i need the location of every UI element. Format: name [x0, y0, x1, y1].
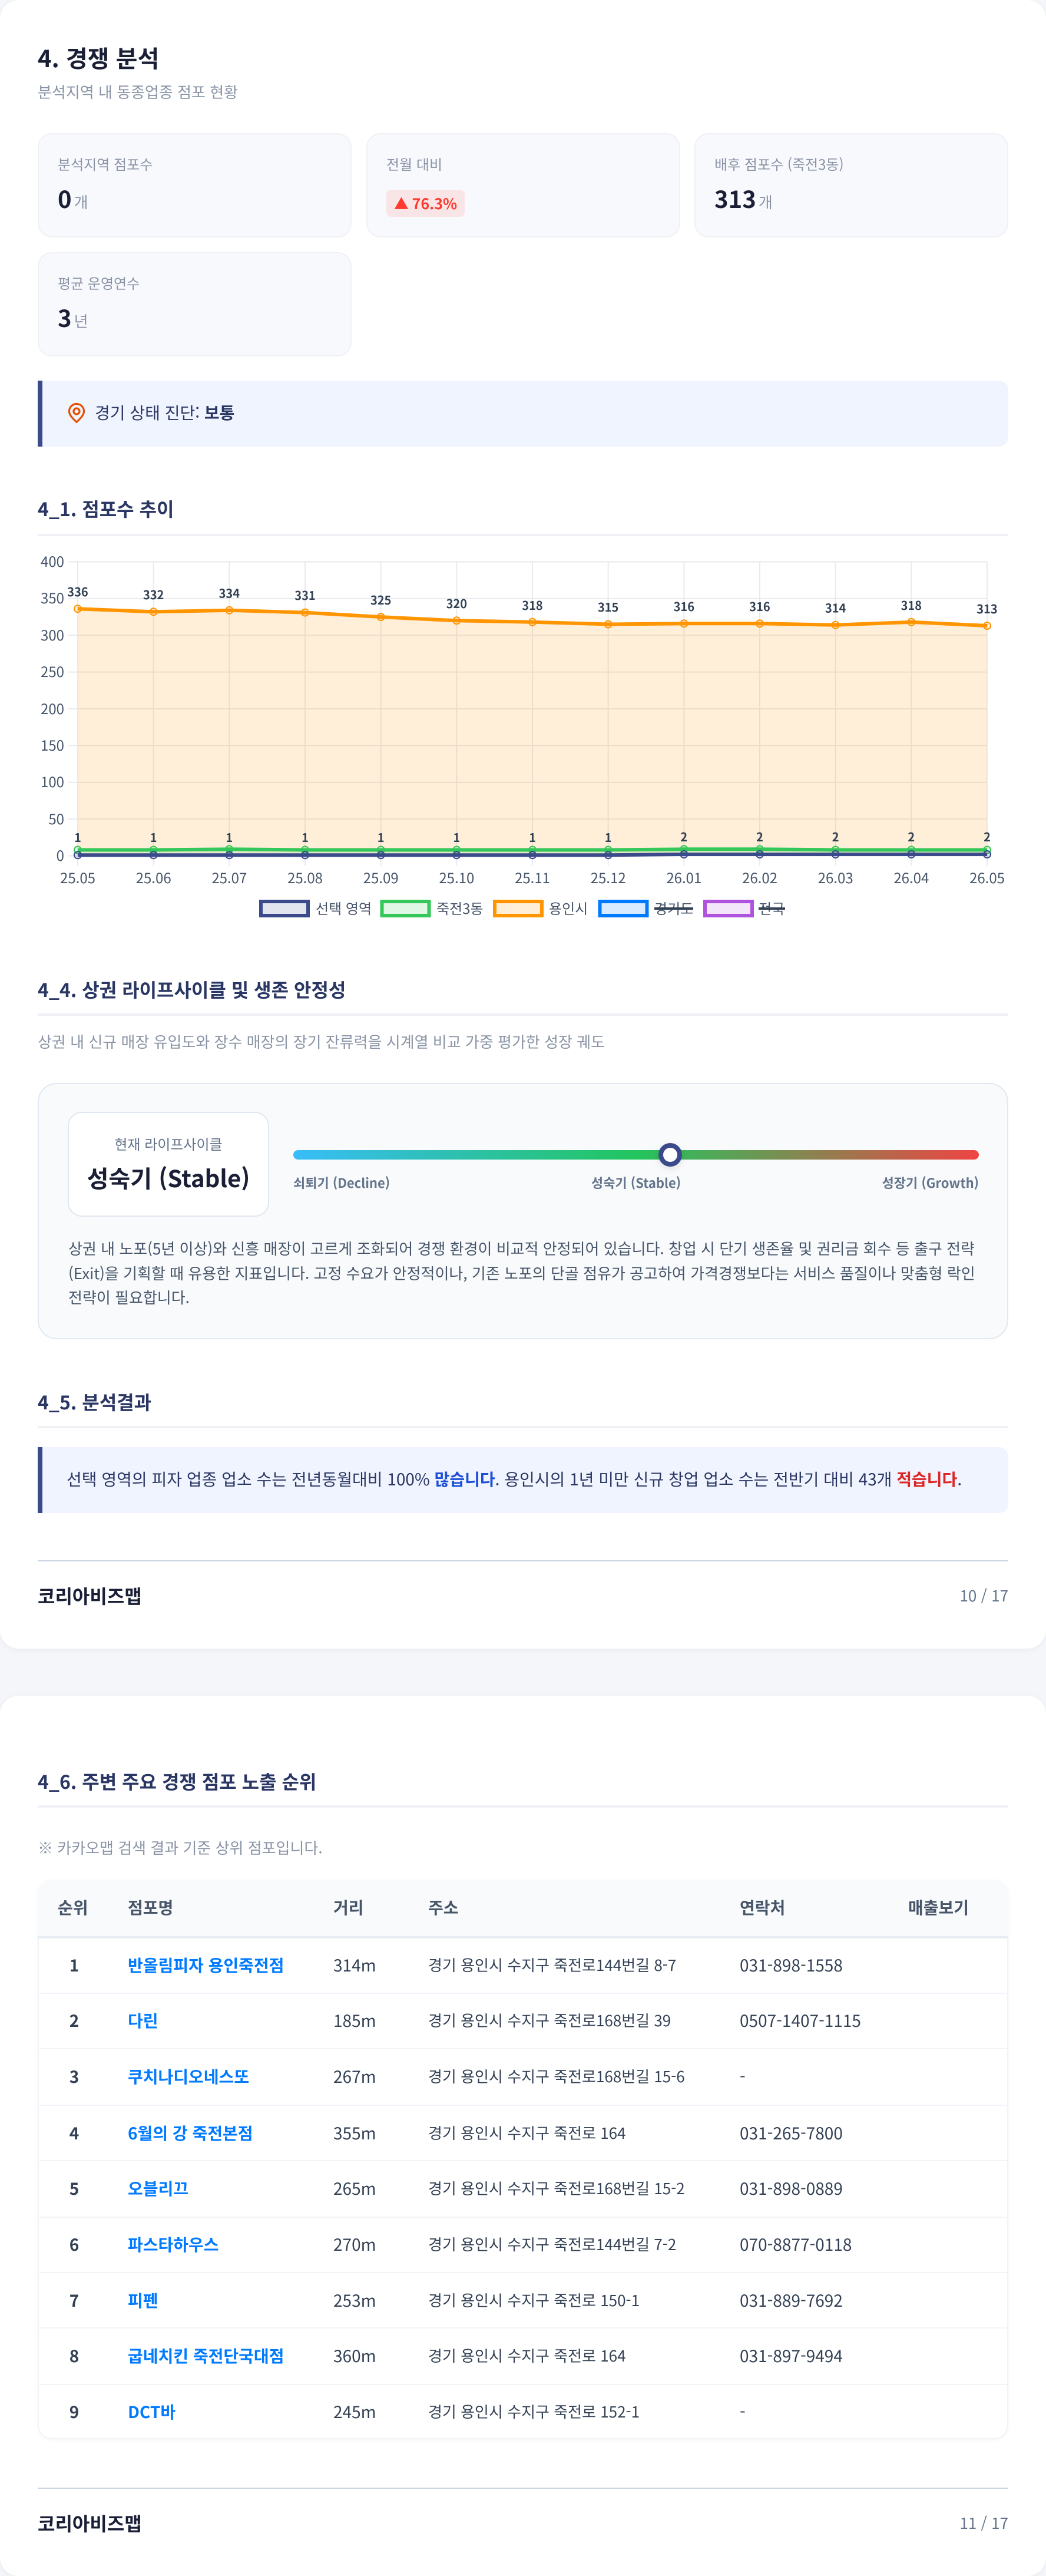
- row 4: 6월의 강 죽전본점: [128, 2121, 253, 2145]
- row 1: 1: [69, 1953, 79, 1977]
- stat card: 전월 대비: [366, 133, 680, 237]
- row 9: [69, 2400, 746, 2423]
- row 3: 3: [69, 2065, 79, 2088]
- row 9: DCT바: [128, 2400, 176, 2423]
- badge: 76.3% up: ▲ 76.3%: [394, 193, 457, 214]
- lifecycle paragraph: 상권 내 노포(5년 이상)와 신흥 매장이 고르게 조화되어 경쟁 환경이 비교적 안정되어 있습니다. 창업 시 단기 생존율 및 권리금 회수 등 출구 전략: [68, 1237, 975, 1259]
- lifecycle marker: [658, 1143, 682, 1167]
- y axis labels: 200: [41, 698, 64, 718]
- row 8: 8: [69, 2344, 79, 2367]
- row 2: [38, 1994, 1008, 2049]
- row 3: 쿠치나디오네스또: [128, 2065, 249, 2088]
- line chart: 점포수 추이: [41, 550, 1005, 918]
- competitor table: [38, 1880, 1008, 2439]
- result callout: 선택 영역의 피자 업종 업소 수는 전년동월대비 100% 많습니다. 용인시의 1년 미만 신규 창업 업소 수는 전반기 대비 43개 적습니다.: [67, 1467, 962, 1491]
- data labels: 용인시: 320: [446, 595, 467, 612]
- diagnosis banner: [38, 381, 1008, 447]
- data labels: 선택 영역: 2: [908, 828, 915, 845]
- x axis labels: 26.03: [818, 867, 853, 887]
- data labels: 용인시: 316: [749, 597, 770, 615]
- y axis labels: [41, 550, 64, 865]
- y axis labels: 50: [48, 808, 64, 828]
- legend: 전국: [759, 897, 784, 918]
- row 1: [38, 1938, 1008, 1994]
- x axis labels: [60, 867, 1005, 887]
- icon: location pin: [68, 403, 85, 423]
- data labels: 용인시: 316: [674, 597, 694, 615]
- x axis labels: 25.06: [136, 867, 171, 887]
- x axis labels: 26.05: [969, 867, 1005, 887]
- stat card: 분석지역 점포수: 분석지역 점포수: [58, 153, 153, 174]
- table header: 주소: [428, 1895, 459, 1919]
- row 4: [38, 2106, 1008, 2161]
- row 6: 6: [69, 2232, 79, 2256]
- y axis labels: 0: [57, 844, 64, 865]
- row 8: [38, 2329, 1008, 2385]
- stat card: 분석지역 점포수: 0개: [58, 181, 88, 215]
- data labels: 선택 영역: 2: [984, 828, 991, 845]
- data labels: 용인시: 334: [219, 584, 240, 601]
- table note: ※ 카카오맵 검색 결과 기준 상위 점포입니다.: [38, 1837, 323, 1858]
- stat card: 배후 점포수: 배후 점포수 (죽전3동): [714, 153, 844, 174]
- row 1: 314m: [333, 1953, 376, 1977]
- table header: 순위: [58, 1895, 88, 1919]
- stat card: 분석지역 점포수: [38, 133, 352, 237]
- data labels: 선택 영역: 1: [150, 828, 157, 846]
- row 7: 7: [69, 2288, 79, 2312]
- heading: 4_4: [38, 977, 1008, 1016]
- row 6: 070-8877-0118: [740, 2232, 852, 2256]
- row 5: 오블리끄: [128, 2177, 188, 2200]
- data labels: 용인시: 336: [67, 583, 88, 600]
- x axis labels: 25.09: [363, 867, 399, 887]
- x axis labels: 26.04: [893, 867, 929, 887]
- legend: 죽전3동: [436, 897, 484, 918]
- row 1: 반올림피자 용인죽전점: [128, 1953, 284, 1977]
- row 6: 경기 용인시 수지구 죽전로144번길 7-2: [428, 2233, 676, 2255]
- row 9: 9: [69, 2400, 79, 2423]
- x axis labels: 25.05: [60, 867, 95, 887]
- footer: page 10: [38, 1560, 1008, 1597]
- legend: 선택 영역: [316, 897, 372, 918]
- row 4: 4: [69, 2121, 79, 2145]
- row 5: 5: [69, 2177, 79, 2200]
- row 1: 031-898-1558: [740, 1953, 843, 1977]
- data labels: 용인시: [67, 583, 998, 617]
- row 7: 031-889-7692: [740, 2288, 843, 2312]
- data labels: 용인시: 332: [143, 586, 164, 603]
- y axis labels: 350: [41, 587, 64, 607]
- row 2: 다린: [128, 2009, 158, 2032]
- table header: [38, 1880, 1008, 1938]
- data labels: 선택 영역: [74, 828, 991, 846]
- data labels: 선택 영역: 2: [680, 828, 687, 845]
- row 2: 경기 용인시 수지구 죽전로168번길 39: [428, 2009, 671, 2031]
- data labels: 선택 영역: 1: [605, 828, 612, 846]
- x axis labels: 26.02: [742, 867, 777, 887]
- lifecycle paragraph: [68, 1237, 975, 1308]
- lifecycle paragraph: 전략이 필요합니다.: [68, 1286, 190, 1308]
- lifecycle paragraph: (Exit)을 기획할 때 유용한 지표입니다. 고정 수요가 안정적이나, 기존 노포의 단골 점유가 공고하여 가격경쟁보다는 서비스 품질이나 맞춤형 락인: [68, 1262, 975, 1284]
- heading: 4_5: [38, 1389, 1008, 1428]
- stat card: 배후 점포수: [694, 133, 1008, 237]
- scale label: decline: 쇠퇴기 (Decline): [293, 1173, 390, 1192]
- heading: 4_6: 4_6. 주변 주요 경쟁 점포 노출 순위: [38, 1768, 316, 1795]
- row 1: 경기 용인시 수지구 죽전로144번길 8-7: [428, 1954, 676, 1976]
- x axis labels: 25.11: [515, 867, 550, 887]
- series: 죽전3동: [74, 846, 991, 856]
- footer: page 11: [38, 2488, 1008, 2524]
- data labels: 용인시: 318: [901, 596, 922, 613]
- heading: 4_6: [38, 1769, 1008, 1808]
- row 6: 파스타하우스: [128, 2232, 219, 2256]
- page 10 panel: [0, 0, 1046, 1649]
- stat card: 평균 운영연수: 3년: [58, 300, 88, 334]
- row 5: 031-898-0889: [740, 2177, 843, 2200]
- series: 선택 영역: [74, 851, 991, 858]
- row 5: 경기 용인시 수지구 죽전로168번길 15-2: [428, 2177, 685, 2199]
- legend: 용인시: [549, 897, 588, 918]
- footer: page 11: 코리아비즈맵: [38, 2509, 142, 2537]
- legend: 경기도: [654, 897, 693, 918]
- row 9: -: [740, 2400, 746, 2423]
- data labels: 용인시: 315: [598, 598, 618, 615]
- data labels: 선택 영역: 2: [832, 828, 839, 845]
- stat card: 배후 점포수: 313개: [714, 181, 773, 215]
- y axis labels: 400: [41, 550, 64, 571]
- scale label: stable: 성숙기 (Stable): [591, 1173, 681, 1192]
- row 4: 031-265-7800: [740, 2121, 843, 2145]
- heading: 4_1: 4_1. 점포수 추이: [38, 495, 174, 522]
- row 3: 경기 용인시 수지구 죽전로168번길 15-6: [428, 2065, 685, 2087]
- data labels: 선택 영역: 1: [302, 828, 309, 846]
- data labels: 선택 영역: 1: [226, 828, 233, 846]
- table header: 점포명: [128, 1895, 173, 1919]
- data labels: 선택 영역: 1: [74, 828, 81, 846]
- current lifecycle box: 성숙기 (Stable): [87, 1160, 250, 1194]
- grid: [68, 562, 987, 866]
- row 7: 피펜: [128, 2288, 158, 2312]
- data labels: 선택 영역: 2: [756, 828, 763, 845]
- row 9: 245m: [333, 2400, 376, 2423]
- x axis labels: 25.12: [591, 867, 626, 887]
- row 2: 185m: [333, 2009, 376, 2032]
- row 9: 경기 용인시 수지구 죽전로 152-1: [428, 2400, 640, 2422]
- stat card: 전월 대비: 전월 대비: [386, 153, 442, 174]
- row 2: 2: [69, 2009, 79, 2032]
- row 4: 355m: [333, 2121, 376, 2145]
- heading: 4_4: 4_4. 상권 라이프사이클 및 생존 안정성: [38, 976, 346, 1003]
- panel: lifecycle: [38, 1083, 1008, 1339]
- row 6: 270m: [333, 2232, 376, 2256]
- lifecycle gradient bar: [293, 1150, 979, 1160]
- row 2: 0507-1407-1115: [740, 2009, 861, 2032]
- row 5: [38, 2161, 1008, 2218]
- y axis labels: 100: [41, 771, 64, 791]
- row 7: 경기 용인시 수지구 죽전로 150-1: [428, 2289, 640, 2311]
- y axis labels: 300: [41, 624, 64, 645]
- row 8: 360m: [333, 2344, 376, 2367]
- page 11 panel: [0, 1696, 1046, 2576]
- table header: 매출보기: [908, 1895, 969, 1919]
- data labels: 용인시: 325: [370, 591, 391, 608]
- data labels: 선택 영역: 1: [378, 828, 385, 846]
- row 7: [38, 2273, 1008, 2329]
- footer: page 10: 코리아비즈맵: [38, 1582, 142, 1609]
- data labels: 용인시: 313: [977, 600, 998, 617]
- row 6: [38, 2218, 1008, 2273]
- diagnosis text: 경기 상태 진단: 보통: [95, 401, 234, 424]
- data labels: 용인시: 318: [522, 596, 543, 613]
- x axis labels: 26.01: [666, 867, 701, 887]
- row 8: 굽네치킨 죽전단국대점: [128, 2344, 284, 2367]
- data labels: 용인시: 314: [825, 599, 846, 616]
- row 7: 253m: [333, 2288, 376, 2312]
- footer: page 10: 10 / 17: [960, 1584, 1008, 1606]
- badge: 76.3% up: [386, 190, 465, 217]
- scale label: growth: 성장기 (Growth): [882, 1173, 979, 1192]
- y axis labels: 250: [41, 660, 64, 681]
- footer: page 11: 11 / 17: [960, 2512, 1008, 2534]
- heading: 4_1: [38, 497, 1008, 536]
- data labels: 선택 영역: 1: [529, 828, 536, 846]
- row 8: 031-897-9494: [740, 2344, 843, 2367]
- x axis labels: 25.07: [211, 867, 247, 887]
- x axis labels: 25.10: [439, 867, 474, 887]
- current lifecycle box: 현재 라이프사이클: [114, 1133, 223, 1154]
- x axis labels: 25.08: [287, 867, 323, 887]
- table header: 연락처: [740, 1895, 785, 1919]
- row 4: 경기 용인시 수지구 죽전로 164: [428, 2122, 626, 2144]
- current lifecycle box: [68, 1112, 269, 1217]
- row 8: 경기 용인시 수지구 죽전로 164: [428, 2344, 626, 2366]
- row 3: [38, 2049, 1008, 2106]
- data labels: 용인시: 331: [294, 586, 316, 603]
- row 5: 265m: [333, 2177, 376, 2200]
- stat card: 평균 운영연수: [38, 252, 352, 356]
- stat card: 평균 운영연수: 평균 운영연수: [58, 272, 140, 293]
- table header: 거리: [333, 1895, 364, 1919]
- row 3: 267m: [333, 2065, 376, 2088]
- section description: 상권 내 신규 매장 유입도와 장수 매장의 장기 잔류력을 시계열 비교 가중 평가한 성장 궤도: [38, 1031, 605, 1052]
- y axis labels: 150: [41, 734, 64, 755]
- legend: [261, 897, 785, 918]
- data labels: 선택 영역: 1: [453, 828, 460, 846]
- title: 4. 경쟁 분석: [38, 40, 159, 74]
- series: 용인시: [74, 605, 991, 856]
- heading: 4_5: 4_5. 분석결과: [38, 1388, 151, 1415]
- result callout: [38, 1447, 1008, 1513]
- row 3: -: [740, 2065, 746, 2088]
- subtitle: 분석지역 내 동종업종 점포 현황: [38, 81, 238, 103]
